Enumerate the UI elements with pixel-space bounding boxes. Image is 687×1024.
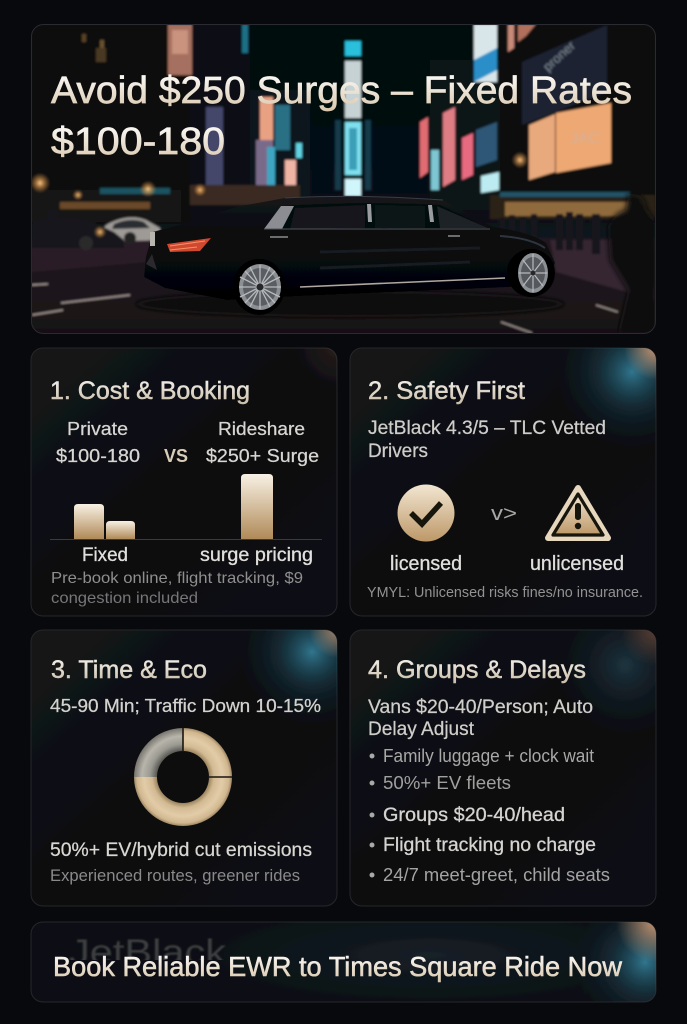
safety note: YMYL: Unlicensed risks fines/no insurance. (367, 584, 643, 601)
bullet list: 50%+ EV fleets (383, 773, 511, 793)
headline (51, 70, 632, 163)
city street night scene: proner (540, 37, 578, 74)
panel 3: time and eco (31, 580, 384, 906)
panel 2: safety first (350, 297, 687, 616)
panel: hero photo with headline (30, 24, 656, 338)
comparison symbol: v> (491, 503, 517, 525)
bullet list: Flight tracking no charge (383, 834, 596, 856)
bullet list: 24/7 meet-greet, child seats (383, 865, 610, 885)
donut chart (134, 728, 232, 826)
subheading: 45-90 Min; Traffic Down 10-15% (50, 695, 321, 716)
heading: 1. Cost & Booking (50, 377, 250, 405)
subheading: JetBlack 4.3/5 – TLC Vetted (368, 418, 606, 439)
emissions text: 50%+ EV/hybrid cut emissions (50, 839, 312, 861)
comparison labels: $250+ Surge (206, 445, 319, 466)
heading: 3. Time & Eco (51, 656, 207, 684)
front wheel (507, 249, 555, 297)
booking note: congestion included (51, 590, 198, 607)
subheading (368, 418, 606, 462)
VS label: VS (164, 446, 188, 466)
limousine (135, 196, 565, 317)
heading: 2. Safety First (368, 377, 525, 405)
ghost brand word: JetBlack (69, 933, 227, 972)
booking note (51, 570, 303, 607)
city street night scene (30, 24, 656, 338)
bar labels: Fixed (82, 545, 128, 566)
comparison labels: $100-180 (56, 445, 140, 466)
icon labels (390, 553, 624, 575)
heading: 4. Groups & Delays (368, 656, 586, 684)
panel 4: groups and delays (350, 630, 656, 906)
call to action text: Book Reliable EWR to Times Square Ride Now (53, 951, 622, 982)
booking note: Pre-book online, flight tracking, $9 (51, 570, 303, 587)
foreground pedestrian (608, 194, 656, 334)
icon labels: licensed (390, 553, 462, 575)
routes note: Experienced routes, greener rides (50, 867, 300, 885)
headline: Avoid $250 Surges – Fixed Rates (51, 70, 632, 112)
subheading (368, 697, 593, 740)
panel 1: cost and booking (31, 308, 377, 616)
city street night scene: JAC (570, 130, 600, 147)
bar labels (82, 545, 313, 566)
bar labels: surge pricing (200, 545, 313, 566)
bar chart (50, 474, 322, 540)
icon: licensed check (398, 484, 454, 542)
subheading: Delay Adjust (368, 719, 475, 740)
icon labels: unlicensed (530, 553, 624, 575)
icon: unlicensed warning (548, 488, 608, 538)
panel: call to action (30, 922, 656, 1002)
subheading: Vans $20-40/Person; Auto (368, 697, 593, 718)
bullet list: Family luggage + clock wait (383, 746, 594, 766)
subheading: Drivers (368, 441, 428, 462)
headline: $100-180 (51, 121, 225, 163)
comparison labels: Rideshare (218, 418, 305, 439)
comparison labels (56, 418, 319, 466)
rear wheel (233, 259, 285, 315)
bullet list: Groups $20-40/head (383, 805, 565, 826)
comparison labels: Private (67, 418, 128, 439)
bullet list (370, 746, 610, 885)
